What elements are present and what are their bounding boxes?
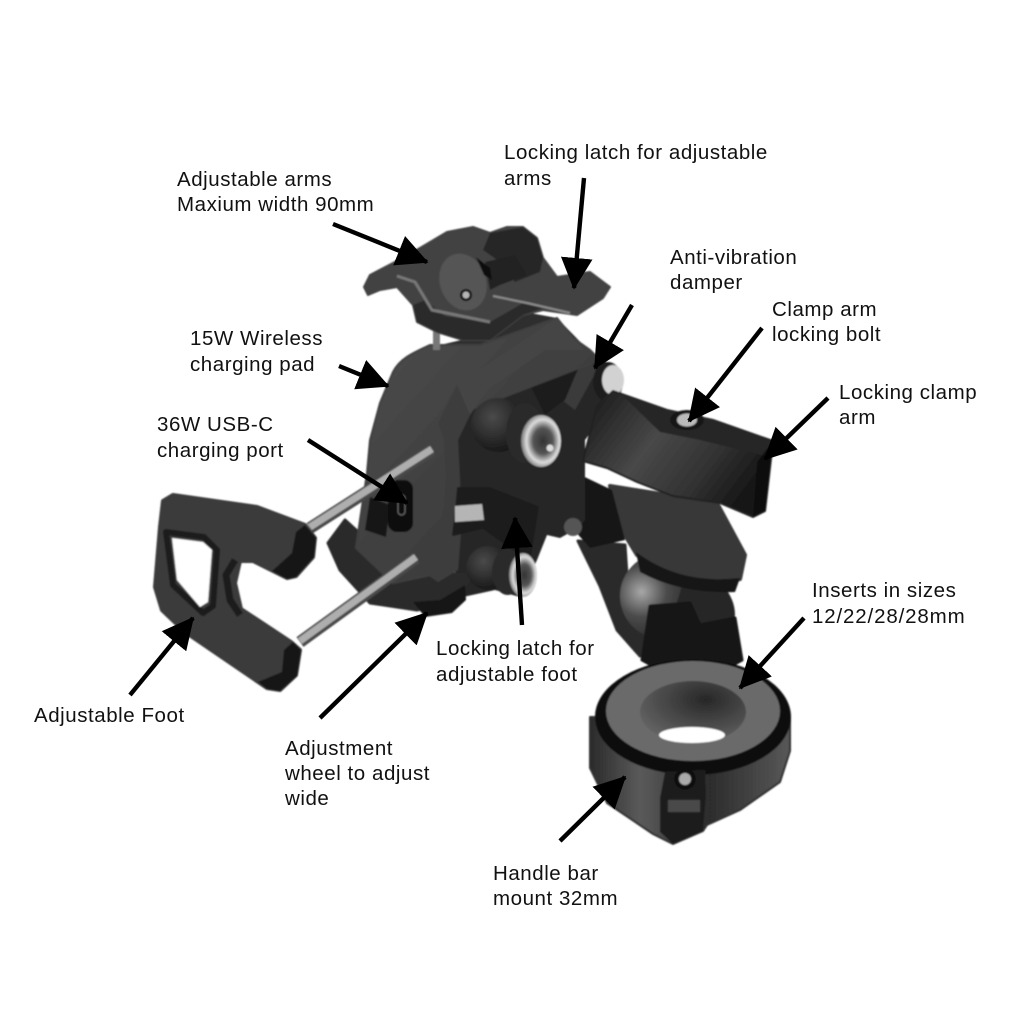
ball joint bracket behind [578,541,735,660]
label: locking latch for foot: adjustable foot [436,663,578,686]
label: USB-C port: charging port [157,439,284,462]
label: clamp arm locking bolt: locking bolt [772,323,881,346]
label: adjustable arms: Adjustable arms [177,168,332,191]
label: inserts: 12/22/28/28mm [812,605,966,628]
gap fill beneath arm [440,312,557,370]
arrow: adjustment wheel [320,613,427,718]
label: locking clamp arm: arm [839,406,876,429]
top adjustable arm [364,227,610,340]
arrow: locking clamp arm [765,398,828,459]
arrow: inserts [740,618,804,688]
arrow: adjustable foot [130,618,193,695]
arrow: handle bar mount [560,777,625,841]
locking latch for foot [453,488,538,557]
label: adjustment wheel: wheel to adjust [284,762,430,785]
lower clamp socket [610,486,745,586]
ring hinge and screw [660,770,706,844]
arm underside and ridges [413,300,543,340]
label: handle bar mount: mount 32mm [493,887,618,910]
arrow: adjustable arms [333,224,427,262]
labels [34,141,977,910]
arrow: locking latch for foot [515,518,522,625]
mount pin [433,328,440,350]
label: USB-C port: 36W USB-C [157,413,274,436]
label: wireless charging pad: charging pad [190,353,315,376]
adjustment wheel [413,585,466,617]
rear bracket [445,318,622,597]
arrow: clamp arm locking bolt [689,328,762,421]
label: adjustment wheel: Adjustment [285,737,393,760]
anti-vibration damper [562,345,596,410]
arrow: USB-C port [308,440,407,503]
label: anti-vibration damper: Anti-vibration [670,246,797,269]
label: handle bar mount: Handle bar [493,862,599,885]
label: anti-vibration damper: damper [670,271,743,294]
label: adjustable arms: Maxium width 90mm [177,193,374,216]
label: locking clamp arm: Locking clamp [839,381,977,404]
arrow: locking latch for adjustable arms [574,178,584,288]
label: locking latch for adjustable arms: Locking latch for adjustable [504,141,768,164]
charging pad body [356,318,600,583]
label: adjustable foot: Adjustable Foot [34,704,185,727]
handlebar ring [590,717,790,844]
arrow: wireless charging pad [339,366,388,386]
rods [310,450,432,528]
label: wireless charging pad: 15W Wireless [190,327,323,350]
label: adjustment wheel: wide [284,787,329,810]
label: locking latch for foot: Locking latch for [436,637,595,660]
rubber balls and bolts [471,398,525,452]
label: clamp arm locking bolt: Clamp arm [772,298,877,321]
vent and USB-C port [365,497,390,537]
product photo: phone mount [155,227,791,844]
locking clamp arm [583,391,773,517]
label: locking latch for adjustable arms: arms [504,167,552,190]
clamp stem [642,603,742,672]
arrows [130,178,828,841]
adjustable foot [155,495,315,690]
arrow: anti-vibration damper [595,305,632,368]
base tray [328,520,472,610]
lighter front band [457,318,585,415]
label: inserts: Inserts in sizes [812,579,956,602]
